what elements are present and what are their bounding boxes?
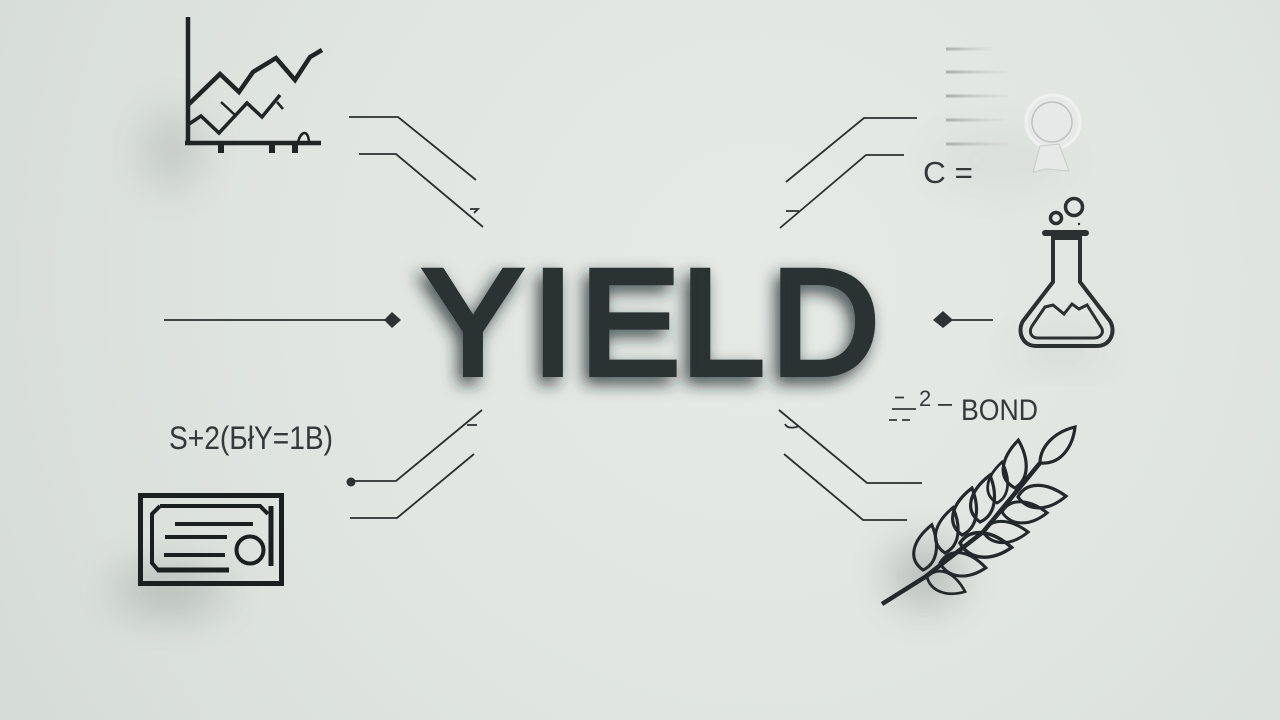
icon: certificate (140, 496, 282, 584)
label: C =: C = (923, 155, 973, 190)
icon: line chart (185, 17, 322, 153)
connector: left (164, 312, 401, 328)
connector: top left lower (359, 154, 483, 227)
bond formula label: 2 (919, 386, 931, 411)
icon: wheat sprig (882, 427, 1075, 604)
formula text: S+2(БłY=1B) (169, 420, 333, 456)
title: YIELD: YIELD (423, 238, 879, 406)
connector: top right lower (780, 155, 904, 228)
icon: faded seal (1026, 95, 1080, 172)
bond formula label: BOND (961, 394, 1038, 427)
connector: bottom right lower (784, 454, 907, 520)
icon: faded document lines (946, 48, 1008, 146)
bond formula label (889, 386, 1038, 427)
connector: top left upper (349, 117, 476, 180)
icon: flask (1021, 198, 1112, 346)
connector: top right upper (786, 118, 917, 182)
connector: flask (933, 311, 993, 328)
connector: bottom right upper (779, 410, 922, 483)
connector: bottom left upper (346, 410, 482, 486)
connector: bottom left lower (350, 454, 474, 518)
soft shadows behind icons (115, 112, 1105, 610)
